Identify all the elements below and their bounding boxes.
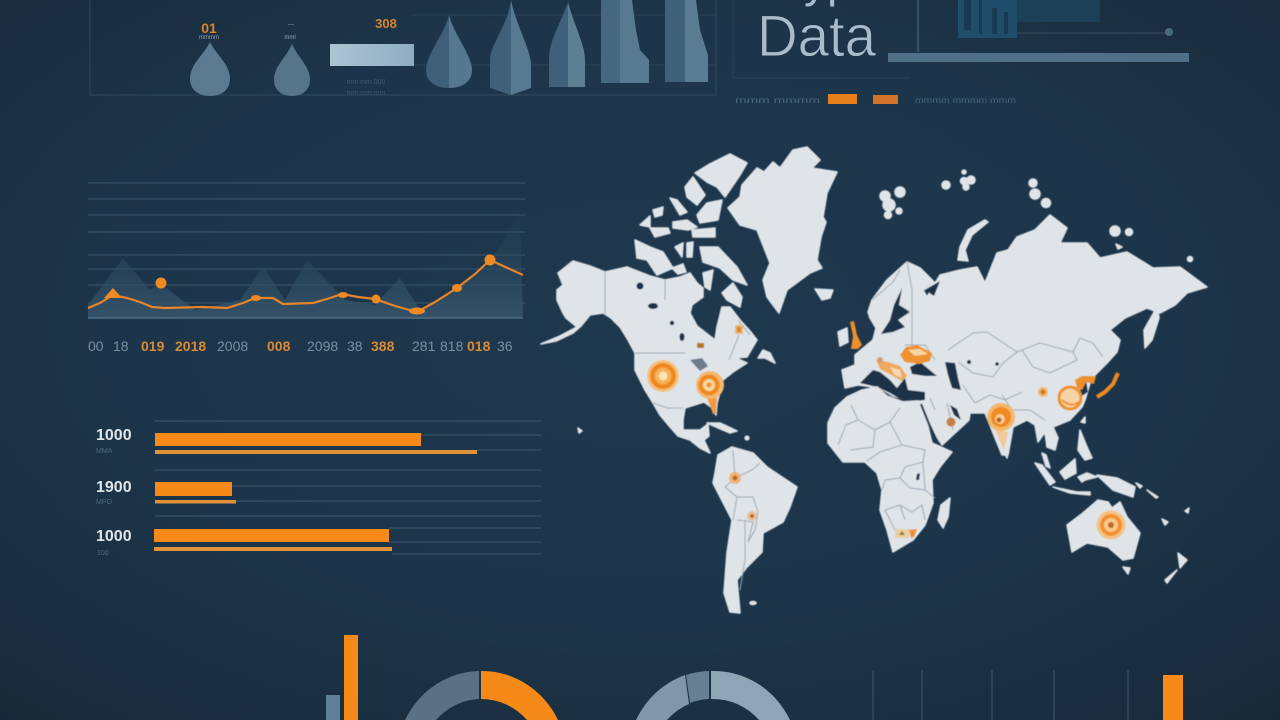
continent: Eurasia [842,215,1207,455]
data markers [104,254,496,314]
slab caption [347,79,386,97]
island: Iceland [815,289,833,300]
bar group three: 100 [97,550,109,557]
tall droplet three [426,15,472,88]
value label three: 308 [375,16,397,31]
hotspot: eastern USA [696,371,724,414]
continent: Australia [1067,500,1140,560]
hotspot: Balkans [876,357,907,381]
tall droplet four [490,0,531,95]
panel: title block [733,0,910,78]
seas and lakes [636,281,1088,420]
bar group one [96,427,477,455]
bar group three [96,528,392,557]
x axis labels: 00 [88,338,104,354]
value label two: — [288,22,294,28]
mini axis line [1017,28,1173,36]
panel: bottom right columns [873,670,1183,720]
bar group three: 1000 [96,528,132,545]
x axis labels [88,338,513,354]
x axis labels: 008 [267,338,291,354]
islands: Caribbean and Atlantic [578,328,848,604]
hotspot: Australia [1096,510,1126,540]
continent: Greenland [728,147,837,313]
panel: top droplet chart [90,0,716,97]
country borders [605,262,1103,590]
x axis labels: 019 [141,338,165,354]
bar group one: MMA [96,448,113,455]
bar group two: 1900 [96,479,132,496]
x axis labels: 36 [497,338,513,354]
x axis labels: 2008 [217,338,248,354]
hotspot: Colombia [729,472,741,484]
hotspot: Korea [1075,376,1096,390]
area peaks [88,213,523,318]
island group: Canadian Arctic [635,154,747,307]
title: Data [757,4,877,69]
value label one: mmmm [199,35,219,41]
icon: droplet two [274,44,310,96]
x axis labels: 388 [371,338,395,354]
hotspot: Eastern Europe [900,345,932,364]
x axis labels: 281 [412,338,436,354]
value label two [284,22,296,41]
hotspot: Japan [1097,373,1118,397]
hotspot: South Africa [895,529,917,538]
island group: Arctic Eurasia [880,170,1192,348]
Red Sea and African lake [916,404,938,480]
continent: North America [541,261,757,453]
x axis labels: 2098 [307,338,338,354]
island: Madagascar [938,498,950,528]
hotspot: western USA [647,360,679,392]
x axis labels: 38 [347,338,363,354]
slab bar [330,44,414,66]
panel: line chart [88,183,525,354]
donut chart: orange [405,671,558,720]
x axis labels: 18 [113,338,129,354]
continent: Africa [828,387,952,552]
slab caption: mm mm mm [347,90,386,97]
island group: Pacific south [1123,553,1187,583]
panel: top right mini chart [888,0,1189,62]
bar group two [96,479,236,506]
hotspot: Bolivia [747,511,757,521]
hotspot: central China [1038,387,1048,397]
mini bars [958,0,1017,38]
hotspot: Arabia [946,418,956,426]
value label two: mml [284,35,296,41]
hotspot: India [987,403,1015,450]
slab caption: mm mm 000 [347,79,386,86]
panel: horizontal bars [96,421,541,557]
panel: bottom column chart [326,635,358,720]
bar group one: 1000 [96,427,132,444]
hotspot: Canada east [735,325,743,334]
continent: South America [713,447,797,613]
x axis labels: 018 [467,338,491,354]
stepped column six [601,0,649,83]
legend row: mmm mmmm [735,95,820,105]
hotspot: Canada central [697,343,704,348]
x axis labels: 2018 [175,338,206,354]
value label one: 01 [201,20,217,36]
bar group two: MPO [96,499,112,506]
hotspot: eastern China [1059,387,1081,409]
value label one [199,20,219,41]
stepped column seven [665,0,708,82]
donut chart: grey [636,671,790,720]
tall spike five [549,2,585,87]
long slider bar [888,53,1189,62]
island group: Southeast Asia [1004,417,1189,525]
icon: droplet one [190,42,230,96]
continent group: Africa [828,387,952,552]
hotspot: UK [850,321,862,349]
world map [541,147,1207,613]
x axis labels: 818 [440,338,464,354]
trend line [88,260,523,312]
legend row [735,94,1016,105]
legend row: mmmm mmmm mmm [915,95,1016,105]
